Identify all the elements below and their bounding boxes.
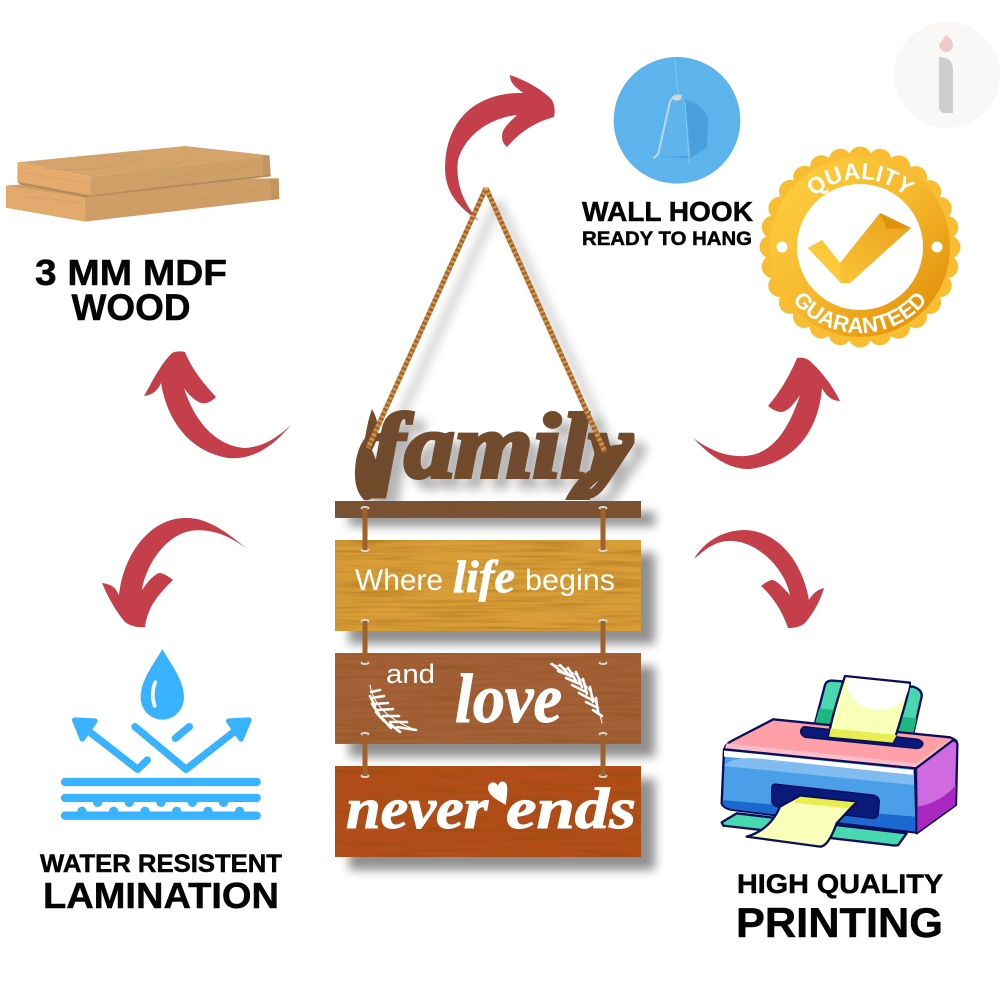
icon: wall hook xyxy=(614,57,740,184)
arrow: to lamination xyxy=(102,518,247,627)
icon: right leaf xyxy=(550,664,602,723)
plank: where life begins xyxy=(335,540,641,631)
arrow: to printer xyxy=(694,530,824,628)
icon: heart xyxy=(488,782,507,805)
plank shadows xyxy=(349,512,655,870)
plank: where life begins: life xyxy=(453,551,515,602)
arrow: to wall hook xyxy=(445,75,555,221)
plank: where life begins: Where xyxy=(355,564,443,597)
top bar xyxy=(335,501,641,518)
heading: 3 mm mdf wood: WOOD xyxy=(72,287,190,328)
plank: and love xyxy=(335,653,641,744)
heading: wall hook xyxy=(582,196,753,250)
icon: left leaf xyxy=(370,685,416,732)
heading: 3 mm mdf wood: 3 MM MDF xyxy=(35,252,227,293)
icon: printer xyxy=(722,676,957,847)
icon: quality guaranteed badge xyxy=(760,146,960,348)
icon: water resistant lamination xyxy=(65,649,257,816)
heading: high quality printing: HIGH QUALITY xyxy=(737,869,943,899)
heading: wall hook: WALL HOOK xyxy=(582,196,753,227)
heading: high quality printing: PRINTING xyxy=(736,899,943,946)
plank: where life begins: begins xyxy=(525,564,615,597)
plank: and love: and xyxy=(386,659,435,689)
plank: never ends xyxy=(335,766,641,857)
rope shadow xyxy=(382,202,618,462)
family lettering: family xyxy=(371,395,634,497)
heading: high quality printing xyxy=(736,869,943,946)
icon: watermark logo xyxy=(894,22,1000,128)
heading: water resistent lamination xyxy=(40,850,282,916)
hanging sign xyxy=(335,188,655,870)
arrow: to wood xyxy=(144,351,291,458)
icon: quality guaranteed badge: QUALITY xyxy=(808,163,916,194)
connecting ropes xyxy=(360,506,608,778)
family shadow: family xyxy=(382,405,645,507)
heading: 3 mm mdf wood xyxy=(35,252,227,328)
hanging rope xyxy=(368,188,605,452)
icon: quality guaranteed badge: GUARANTEED xyxy=(795,293,924,334)
heading: water resistent lamination: WATER RESISTENT xyxy=(40,850,282,878)
arrow: to quality badge xyxy=(693,358,840,469)
plank: never ends: ends xyxy=(506,776,636,841)
icon: wood planks xyxy=(6,146,279,222)
heading: wall hook: READY TO HANG xyxy=(582,228,752,250)
heading: water resistent lamination: LAMINATION xyxy=(43,875,279,916)
plank: and love: love xyxy=(455,661,562,738)
plank: never ends: never xyxy=(346,776,488,841)
